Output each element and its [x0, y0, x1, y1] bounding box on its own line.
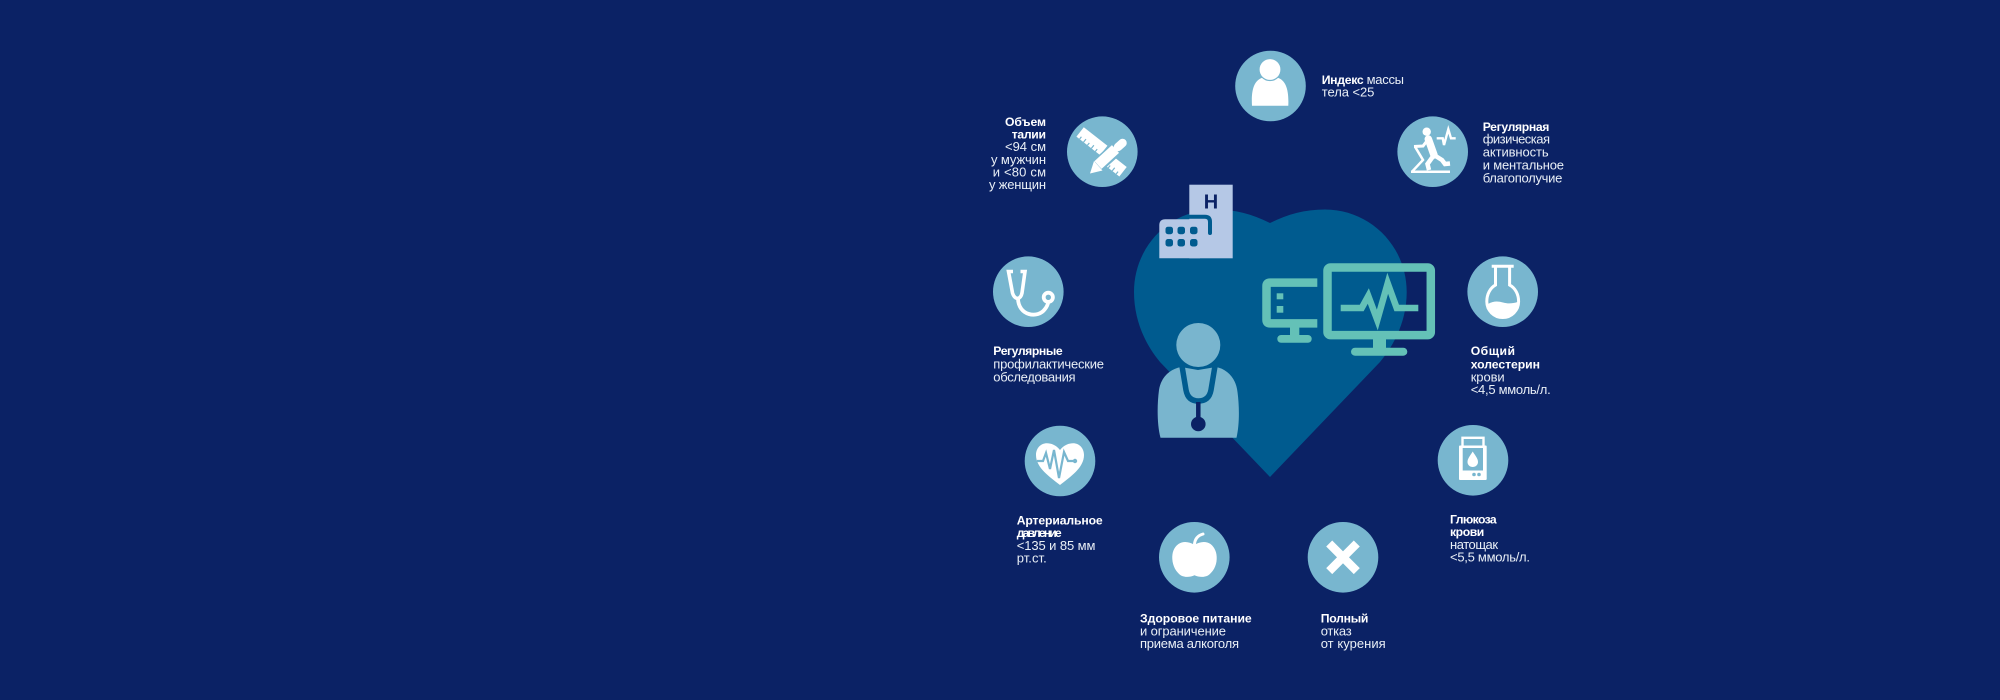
- icon: hospital: [1159, 185, 1233, 258]
- item: blood glucose: крови: [1450, 525, 1484, 539]
- item: no smoking: Полный: [1321, 611, 1368, 625]
- item: body mass index: тела <25: [1322, 85, 1374, 100]
- item: blood pressure: рт.ст.: [1017, 551, 1047, 566]
- item: cholesterol: Общий: [1471, 344, 1515, 358]
- central heart: [1134, 210, 1407, 477]
- item: blood glucose: Глюкоза: [1450, 512, 1497, 526]
- icon: large monitor with ECG: [1328, 268, 1431, 356]
- item: waist size: талии: [1012, 128, 1046, 142]
- item: physical activity: [1397, 116, 1564, 187]
- item: waist size: <94 см: [1005, 139, 1046, 154]
- icon: small monitor: [1266, 283, 1317, 343]
- item: healthy eating: [1140, 522, 1252, 651]
- item: regular check-ups: профилактические: [993, 356, 1104, 371]
- item: blood glucose: <5,5 ммоль/л.: [1450, 550, 1530, 565]
- item: physical activity: активность: [1483, 145, 1549, 160]
- item: physical activity: Регулярная: [1483, 120, 1549, 134]
- item: no smoking: от курения: [1321, 636, 1386, 651]
- item: physical activity: и ментальное: [1483, 157, 1564, 172]
- item: waist size: у женщин: [989, 177, 1046, 192]
- item: no smoking: [1308, 522, 1386, 651]
- item: body mass index: Индекс массы: [1322, 72, 1404, 87]
- item: cholesterol: крови: [1471, 369, 1505, 384]
- item: no smoking: отказ: [1321, 623, 1352, 638]
- item: healthy eating: Здоровое питание: [1140, 611, 1252, 625]
- item: cholesterol: холестерин: [1471, 357, 1540, 371]
- icon: doctor: [1158, 323, 1239, 438]
- item: waist size: Объем: [1005, 115, 1046, 129]
- item: cholesterol: [1467, 256, 1551, 397]
- item: healthy eating: приема алкоголя: [1140, 636, 1239, 651]
- item: waist size: и <80 см: [993, 164, 1046, 179]
- item: regular check-ups: [993, 256, 1104, 384]
- item: waist size: у мужчин: [991, 152, 1046, 167]
- item: blood pressure: [1017, 426, 1103, 566]
- item: blood pressure: <135 и 85 мм: [1017, 538, 1095, 553]
- item: cholesterol: <4,5 ммоль/л.: [1471, 382, 1551, 397]
- item: blood pressure: давление: [1017, 526, 1062, 540]
- item: blood glucose: натощак: [1450, 537, 1498, 552]
- item: healthy eating: и ограничение: [1140, 623, 1226, 638]
- item: waist size: [989, 115, 1138, 192]
- item: blood pressure: Артериальное: [1017, 513, 1103, 527]
- item: regular check-ups: обследования: [993, 369, 1076, 384]
- item: regular check-ups: Регулярные: [993, 344, 1063, 358]
- item: physical activity: физическая: [1483, 132, 1550, 147]
- item: body mass index: [1235, 51, 1404, 121]
- icon: hospital: H: [1204, 192, 1218, 214]
- item: physical activity: благополучие: [1483, 170, 1562, 185]
- item: blood glucose: [1438, 425, 1530, 565]
